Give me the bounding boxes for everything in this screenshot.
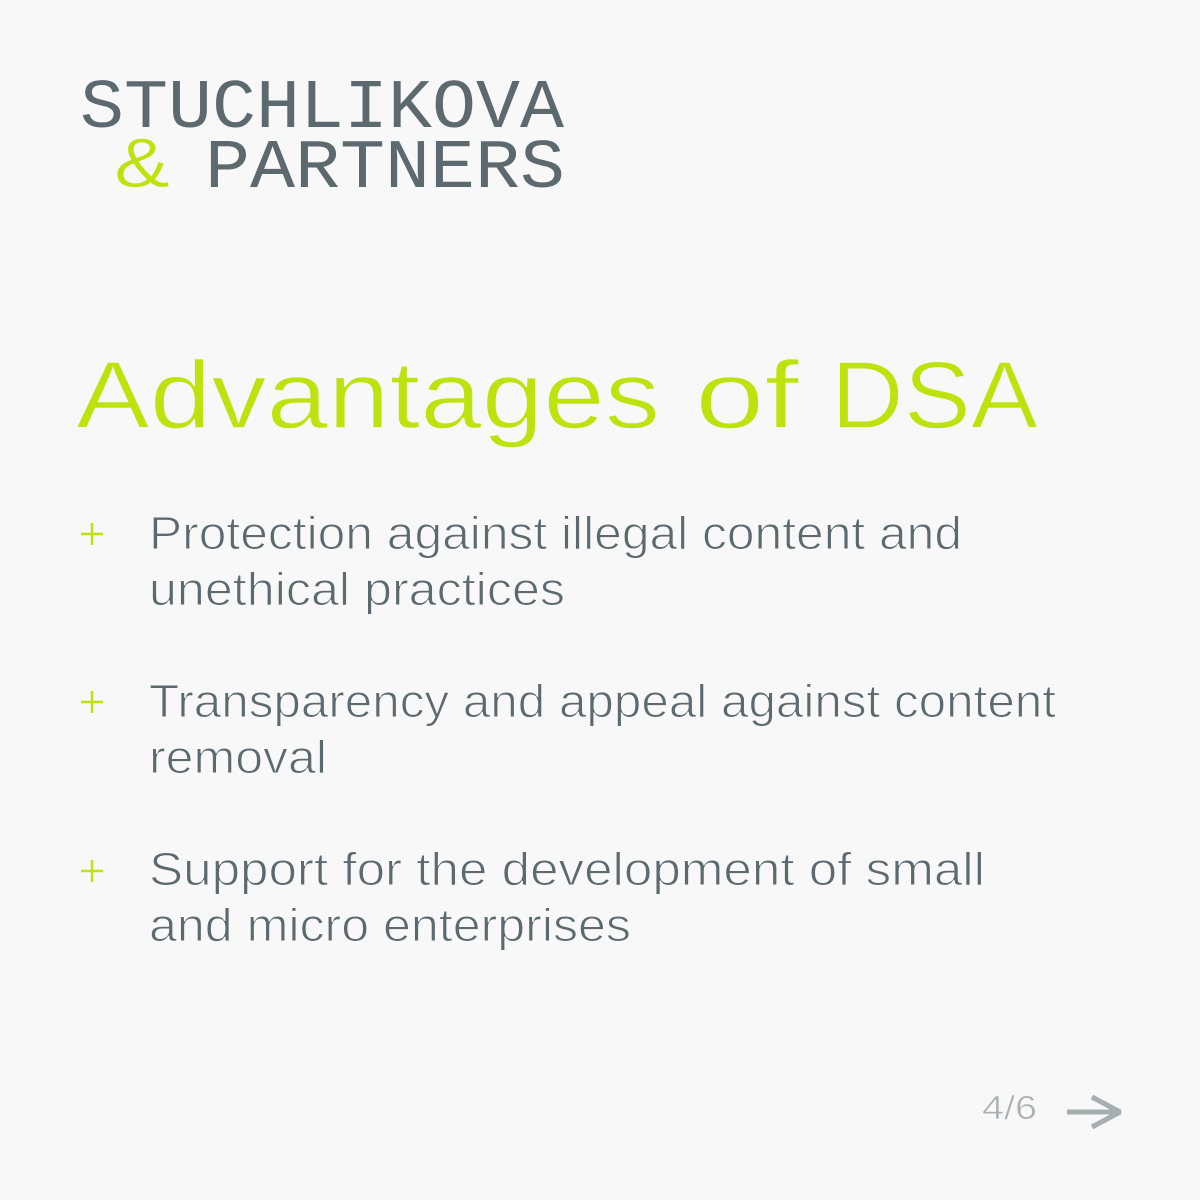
- item text: Protection against illegal content and: [149, 507, 962, 559]
- page number: 4/6: [982, 1089, 1037, 1126]
- logo text: Stuchlikova: STUCHLIKOVA: [80, 70, 564, 149]
- item text: Support for the development of small: [149, 843, 985, 895]
- icon: arrow: [1067, 1097, 1120, 1127]
- logo ampersand: &: [114, 124, 170, 202]
- plus icon: [81, 860, 103, 882]
- list item 2: removal: [149, 731, 327, 783]
- logo: [80, 70, 565, 209]
- logo text: Partners: PARTNERS: [205, 130, 565, 209]
- plus icon: [81, 523, 103, 545]
- list item 1: [81, 507, 962, 615]
- item text: Transparency and appeal against content: [149, 675, 1056, 727]
- list item 1: unethical practices: [149, 563, 565, 615]
- list item 3: [81, 843, 985, 951]
- list item 3: and micro enterprises: [149, 899, 631, 951]
- title: Advantages: [76, 342, 660, 449]
- title: DSA: [831, 342, 1038, 449]
- list item 2: [81, 675, 1056, 783]
- title: [76, 342, 1038, 449]
- plus icon: [81, 691, 103, 713]
- title: of: [695, 342, 799, 449]
